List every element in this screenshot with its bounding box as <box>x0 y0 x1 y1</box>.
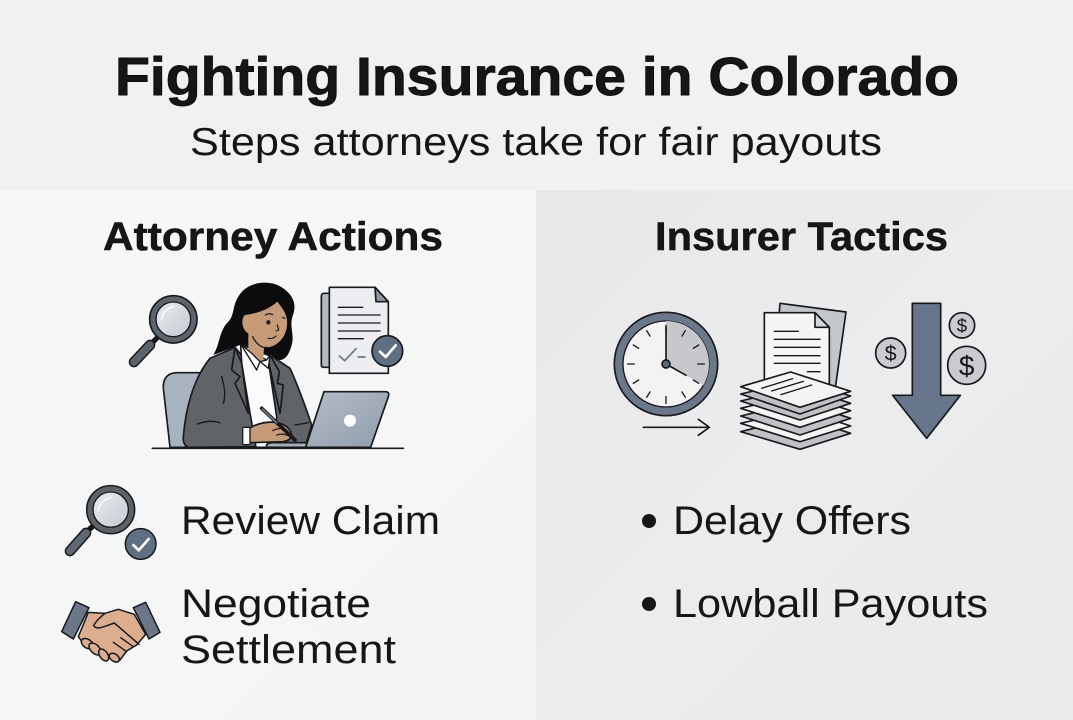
jacket <box>183 347 312 447</box>
pen <box>262 408 295 440</box>
heading: insurer tactics: Insurer Tactics <box>655 215 948 259</box>
icon: clock <box>614 312 718 435</box>
label: negotiate settlement: Settlement <box>181 628 396 672</box>
list item: review claim <box>70 486 440 559</box>
title: Fighting Insurance in Colorado <box>115 47 959 107</box>
list item: lowball payouts: Lowball Payouts <box>673 582 988 626</box>
label: negotiate settlement: Negotiate <box>181 582 371 626</box>
laptop base <box>267 443 307 447</box>
list item: delay offers: Delay Offers <box>673 499 911 543</box>
icon: paperwork stack <box>741 303 851 449</box>
desk line <box>152 446 403 451</box>
header band <box>0 0 1073 190</box>
icon: falling payout arrow with coins <box>876 303 986 438</box>
collar <box>241 344 270 370</box>
laptop screen <box>306 392 389 447</box>
subtitle: Steps attorneys take for fair payouts <box>190 121 882 164</box>
icon: falling payout arrow with coins: $ <box>957 315 968 336</box>
panel: insurer tactics <box>536 190 1073 720</box>
icon: falling payout arrow with coins: $ <box>885 342 897 366</box>
label: review claim: Review Claim <box>181 499 440 543</box>
list item: negotiate settlement <box>62 582 396 672</box>
lapels <box>232 347 283 413</box>
icon: handshake <box>62 602 160 664</box>
icon: falling payout arrow with coins: $ <box>959 350 975 381</box>
icon: document with check <box>321 287 403 373</box>
heading: attorney actions: Attorney Actions <box>103 215 443 259</box>
label: negotiate settlement <box>181 582 396 672</box>
illustration: attorney at laptop <box>134 283 403 448</box>
chair <box>163 373 200 447</box>
panel: attorney actions <box>0 190 536 720</box>
illustration: insurer tactics icons <box>614 303 986 449</box>
hand <box>249 422 291 443</box>
shirt <box>241 344 277 447</box>
hair <box>213 283 294 360</box>
face and neck <box>242 302 287 365</box>
icon: magnifier with check <box>70 486 156 559</box>
icon: magnifying glass <box>134 296 197 362</box>
